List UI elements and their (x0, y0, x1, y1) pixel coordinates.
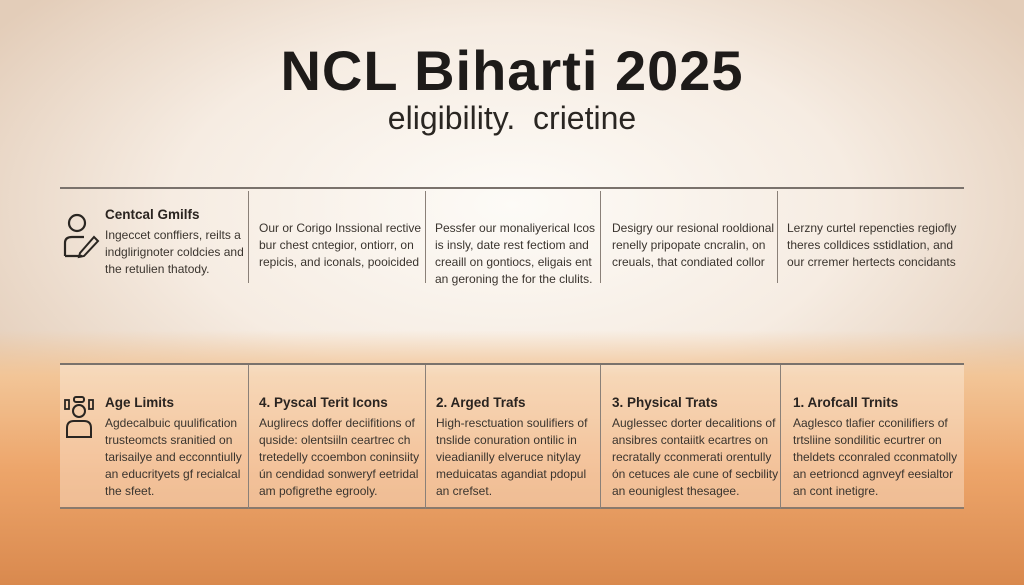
card: 2: High-resctuation soulifiers of (436, 416, 587, 430)
card: 4: ún cendidad sonweryf eetridal (259, 467, 418, 481)
bottom row panel (60, 363, 964, 509)
card 1: Centcal Gmilfs (105, 207, 200, 222)
card: Age Limits: Age Limits (105, 395, 174, 410)
card 2: Our or Corigo Inssional rective (259, 221, 421, 235)
card: 2: 2. Arged Trafs (436, 395, 526, 410)
card: 1: an cont inetigre. (793, 484, 878, 498)
card: Age Limits: the sfeet. (105, 484, 154, 498)
card 5: Lerzny curtel repencties regiofly (787, 221, 956, 235)
card 3: an geroning the for the clulits. (435, 272, 592, 286)
card: 4 (259, 395, 420, 498)
title: NCL Biharti 2025 (280, 39, 744, 102)
icon: person with pen (64, 214, 100, 258)
card 1: Ingeccet conffiers, reilts a (105, 228, 241, 242)
card 3: creaill on gontiocs, eligais ent (435, 255, 592, 269)
card 3: Pessfer our monaliyerical Icos (435, 221, 595, 235)
card: 4: am pofigrethe egrooly. (259, 484, 378, 498)
card: Age Limits: an educrityets gf recialcal (105, 467, 240, 481)
card 3 (435, 221, 595, 286)
card: 1: an eetrioncd agnveyf eesialtor (793, 467, 953, 481)
card 5 (787, 221, 956, 269)
card: Age Limits: Agdecalbuic quulification (105, 416, 237, 430)
card: 1 (793, 395, 958, 498)
subtitle: eligibility. crietine (388, 100, 636, 136)
card 4: renelly pripopate cncralin, on (612, 238, 765, 252)
card: Age Limits (105, 395, 242, 498)
card: 4: 4. Pyscal Terit Icons (259, 395, 388, 410)
top row panel (60, 187, 964, 286)
card: 1: trtsliine sondilitic ecurtrer on (793, 433, 942, 447)
card 2: bur chest cntegior, ontiorr, on (259, 238, 414, 252)
card 2 (259, 221, 421, 269)
card: 3: 3. Physical Trats (612, 395, 718, 410)
icon: person (64, 396, 94, 438)
card 5: theres colldices sstidlation, and (787, 238, 953, 252)
card: 4: Auglirecs doffer deciifitions of (259, 416, 415, 430)
card 3: is insly, date rest fectiom and (435, 238, 589, 252)
card 1: the retulien thatody. (105, 262, 210, 276)
card: 3: an eouniglest thesagee. (612, 484, 739, 498)
card: 2: an crefset. (436, 484, 492, 498)
card 5: our crremer hertects concidants (787, 255, 956, 269)
card: 1: Aaglesco tlafier cconilifiers of (793, 416, 948, 430)
card: 2: meduicatas agandiat pdopul (436, 467, 586, 481)
card 4 (612, 221, 774, 269)
card: 2 (436, 395, 588, 498)
card: 3 (612, 395, 778, 498)
card: 4: quside: olentsiiln ceartrec ch (259, 433, 410, 447)
card: Age Limits: trusteomcts sranitied on (105, 433, 232, 447)
card: 1: 1. Arofcall Trnits (793, 395, 898, 410)
card: 3: ansibres contaiitk ecartres on (612, 433, 768, 447)
card 1: indglirignoter coldcies and (105, 245, 244, 259)
card: 3: ón cetuces ale cune of secbility (612, 467, 778, 481)
card: 3: Auglessec dorter decalitions of (612, 416, 775, 430)
card: 3: recratally cconmerati orentully (612, 450, 771, 464)
card: Age Limits: tarisailye and ecconntiully (105, 450, 242, 464)
card 1 (105, 207, 244, 276)
card 4: Desigry our resional rooldional (612, 221, 774, 235)
card: 2: vieadianilly elveruce nitylay (436, 450, 581, 464)
card: 1: theldets cconraled cconmatolly (793, 450, 957, 464)
card: 2: tnslide conuration ontilic in (436, 433, 577, 447)
card 4: creuals, that condiated collor (612, 255, 765, 269)
card: 4: tretedelly ccoembon coninsiity (259, 450, 419, 464)
card 2: repicis, and iconals, pooicided (259, 255, 419, 269)
